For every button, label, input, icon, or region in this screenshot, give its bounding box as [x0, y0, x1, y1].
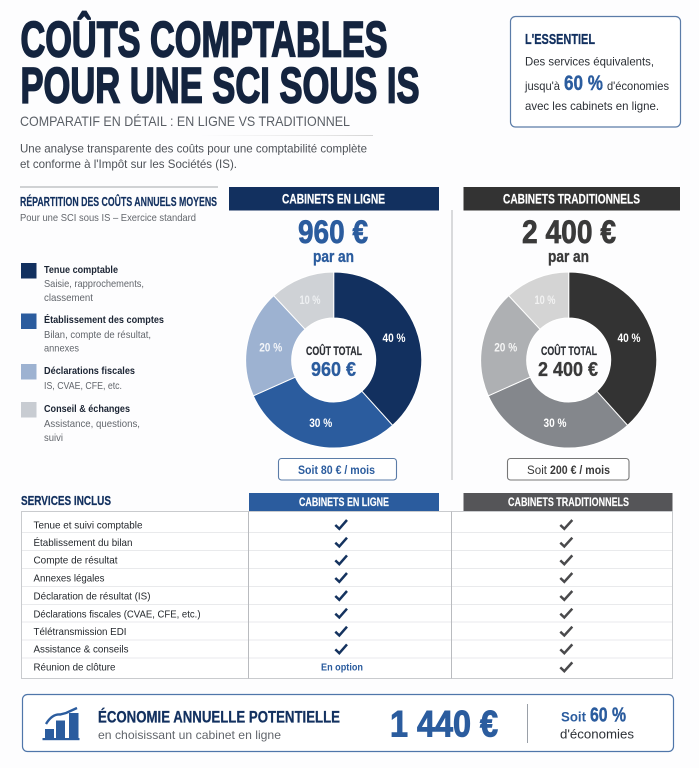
- annual price: par an: [313, 247, 354, 266]
- donut labels: [259, 295, 406, 430]
- panel header: CABINETS EN LIGNE: [282, 192, 385, 206]
- column header: en ligne: [249, 493, 439, 512]
- table heading: SERVICES INCLUS: [21, 493, 111, 508]
- service names: Déclaration de résultat (IS): [34, 590, 150, 602]
- donut chart: [481, 272, 657, 448]
- donut centre total: COÛT TOTAL: [541, 343, 597, 358]
- service names: Télétransmission EDI: [34, 626, 126, 638]
- service names: Établissement du bilan: [34, 536, 133, 549]
- callout: l'essentiel: d'économies: [607, 79, 669, 93]
- option label: En option: [321, 662, 363, 674]
- monthly pill: Soit: [527, 465, 548, 477]
- callout: l'essentiel: L'ESSENTIEL: [525, 32, 595, 48]
- service names: Réunion de clôture: [34, 662, 116, 674]
- savings banner: [22, 694, 674, 752]
- service names: Compte de résultat: [34, 555, 118, 567]
- callout: l'essentiel: [510, 16, 680, 127]
- donut labels: 20 %: [259, 343, 282, 355]
- legend: conseil et échanges: Conseil & échanges: [44, 403, 130, 415]
- title: [20, 10, 420, 114]
- donut labels: 10 %: [300, 295, 320, 307]
- panel: cabinets traditionnels: [464, 187, 680, 480]
- callout: l'essentiel: jusqu'à: [524, 79, 560, 93]
- callout: l'essentiel: 60 %: [564, 72, 603, 95]
- intro text: et conforme à l'Impôt sur les Sociétés (IS).: [20, 157, 237, 171]
- service names: [34, 519, 200, 674]
- subtitle: COMPARATIF EN DÉTAIL : EN LIGNE VS TRADITIONNEL: [20, 113, 350, 129]
- legend: établissement des comptes: annexes: [44, 342, 79, 354]
- service names: Assistance & conseils: [34, 644, 128, 656]
- column header: traditionnels: [464, 493, 672, 512]
- legend: déclarations fiscales: Déclarations fiscales: [44, 365, 135, 377]
- section heading: répartition: Pour une SCI sous IS – Exercice standard: [20, 212, 196, 224]
- annual price: 2 400 €: [522, 214, 616, 250]
- donut centre total: [538, 343, 598, 381]
- legend: conseil et échanges: suivi: [44, 432, 63, 444]
- section heading: répartition: [20, 186, 218, 224]
- service names: Déclarations fiscales (CVAE, CFE, etc.): [34, 608, 200, 620]
- column header: traditionnels: CABINETS TRADITIONNELS: [508, 497, 629, 509]
- savings percentage: d'économies: [560, 727, 634, 742]
- checks: en ligne: [335, 520, 347, 653]
- panel header: [229, 187, 439, 210]
- services table: [21, 493, 672, 678]
- annual price: [522, 214, 616, 266]
- annual price: [298, 214, 368, 266]
- banner text: [98, 708, 340, 742]
- column header: en ligne: CABINETS EN LIGNE: [299, 497, 389, 509]
- donut labels: 20 %: [494, 343, 517, 355]
- intro text: [20, 142, 367, 171]
- panel header: CABINETS TRADITIONNELS: [503, 192, 640, 206]
- savings percentage: Soit: [561, 709, 586, 725]
- callout: l'essentiel: avec les cabinets en ligne.: [525, 99, 659, 113]
- icon: rising bar chart: [42, 708, 80, 740]
- callout: l'essentiel: Des services équivalents,: [525, 54, 654, 68]
- donut labels: 30 %: [309, 418, 332, 430]
- savings percentage: 60 %: [590, 705, 626, 727]
- legend: déclarations fiscales: [21, 364, 135, 392]
- donut labels: 40 %: [618, 333, 640, 345]
- donut labels: 10 %: [534, 295, 556, 307]
- legend: établissement des comptes: Établissement des comptes: [44, 313, 164, 326]
- banner text: en choisissant un cabinet en ligne: [98, 728, 281, 742]
- donut centre total: [306, 343, 362, 381]
- checks: traditionnels: [560, 520, 572, 671]
- legend: tenue comptable: Tenue comptable: [44, 264, 118, 276]
- monthly pill: [508, 458, 629, 480]
- panel: cabinets en ligne: [229, 187, 439, 480]
- panel header: [464, 187, 680, 210]
- banner text: ÉCONOMIE ANNUELLE POTENTIELLE: [98, 708, 340, 727]
- savings percentage: [560, 705, 634, 742]
- donut centre total: COÛT TOTAL: [306, 343, 362, 358]
- donut centre total: 2 400 €: [538, 359, 598, 381]
- legend: conseil et échanges: [21, 402, 140, 444]
- donut labels: 30 %: [544, 418, 566, 430]
- legend: conseil et échanges: Assistance, questions,: [44, 418, 140, 430]
- monthly pill: 200 € / mois: [550, 465, 610, 477]
- annual price: par an: [548, 247, 589, 266]
- title: POUR UNE SCI SOUS IS: [20, 58, 420, 114]
- service names: Tenue et suivi comptable: [34, 519, 143, 531]
- donut chart: [246, 272, 422, 448]
- monthly pill: [278, 458, 396, 480]
- legend: établissement des comptes: [21, 313, 164, 354]
- donut labels: 40 %: [382, 333, 406, 345]
- legend: établissement des comptes: Bilan, compte de résultat,: [44, 329, 151, 341]
- section heading: répartition: RÉPARTITION DES COÛTS ANNUELS MOYENS: [20, 194, 217, 209]
- intro text: Une analyse transparente des coûts pour une comptabilité complète: [20, 142, 367, 156]
- legend: tenue comptable: Saisie, rapprochements,: [44, 278, 144, 290]
- legend: tenue comptable: classement: [44, 292, 93, 304]
- legend: déclarations fiscales: IS, CVAE, CFE, etc.: [44, 380, 122, 392]
- title: COÛTS COMPTABLES: [20, 10, 388, 68]
- monthly pill: Soit 80 € / mois: [298, 465, 375, 477]
- savings amount: 1 440 €: [390, 703, 498, 745]
- donut labels: [494, 295, 640, 430]
- annual price: 960 €: [298, 214, 368, 250]
- legend: tenue comptable: [21, 263, 144, 304]
- legend: [21, 263, 164, 444]
- donut centre total: 960 €: [311, 359, 356, 381]
- service names: Annexes légales: [34, 573, 104, 585]
